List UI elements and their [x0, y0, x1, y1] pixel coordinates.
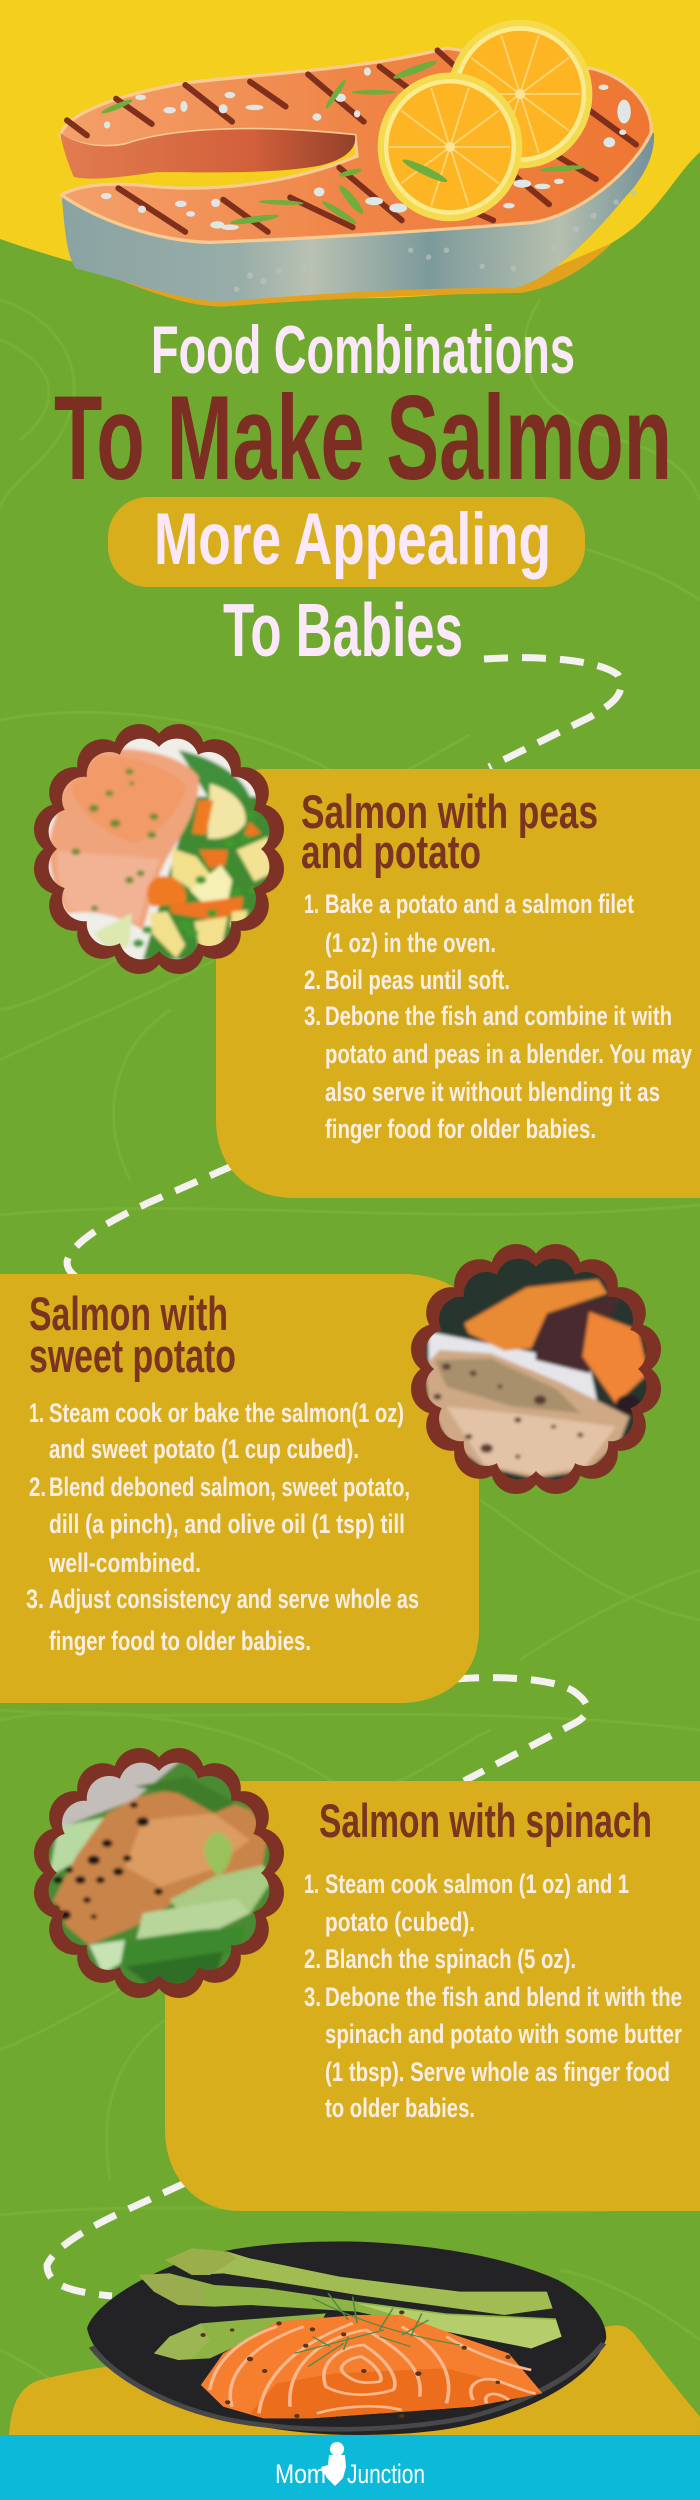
title line: To Babies: To Babies [223, 588, 463, 672]
title line: More Appealing: More Appealing [154, 499, 551, 580]
steps list: Blend deboned salmon, sweet potato, [49, 1472, 410, 1502]
steps list: Adjust consistency and serve whole as [49, 1584, 419, 1614]
heading: Salmon with peas [301, 785, 598, 838]
steps list: to older babies. [325, 2093, 475, 2123]
steps list: 2. [29, 1472, 46, 1502]
title pill [108, 497, 585, 587]
steps list: and sweet potato (1 cup cubed). [49, 1434, 359, 1464]
steps list: 3. [304, 1982, 321, 2012]
hero illustration: grilled salmon steak with orange slices [60, 20, 654, 307]
steps list: 3. [26, 1584, 44, 1614]
panel: salmon with peas and potato [216, 769, 700, 1198]
steps list: finger food for older babies. [325, 1114, 596, 1144]
steps list [304, 889, 692, 1144]
bottom illustration: salmon and asparagus on plate [9, 2242, 700, 2435]
steps list [304, 1869, 682, 2123]
photo badge: salmon with spinach [27, 1743, 295, 2003]
heading: Salmon with [29, 1287, 228, 1340]
steps list: 2. [304, 1944, 321, 1974]
heading: sweet potato [29, 1329, 236, 1382]
title block [54, 312, 672, 672]
steps list: Blanch the spinach (5 oz). [325, 1944, 576, 1974]
steps list: dill (a pinch), and olive oil (1 tsp) till [49, 1509, 405, 1539]
heading [301, 785, 598, 878]
steps list: 1. [29, 1398, 44, 1428]
heading [29, 1287, 236, 1382]
panel: salmon with spinach [165, 1781, 700, 2211]
steps list: 3. [304, 1001, 321, 1031]
photo badge: salmon with vegetables [27, 720, 295, 974]
steps list: (1 oz) in the oven. [325, 928, 496, 958]
logo: MomJunction [275, 2442, 425, 2489]
asparagus [138, 2248, 562, 2360]
footer band [0, 2435, 700, 2500]
logo: MomJunction: Mom [275, 2459, 326, 2489]
steps list: Steam cook or bake the salmon(1 oz) [49, 1398, 404, 1428]
yellow ground shape [9, 2325, 700, 2435]
steps list: finger food to older babies. [49, 1626, 311, 1656]
photo badge: salmon with sweet potato [402, 1244, 679, 1494]
black plate [87, 2242, 606, 2435]
salmon fillet [200, 2310, 542, 2418]
steps list [26, 1398, 419, 1656]
heading: and potato [301, 825, 481, 878]
steps list: 2. [304, 965, 321, 995]
steps list: Boil peas until soft. [325, 965, 510, 995]
steps list: potato (cubed). [325, 1907, 475, 1937]
dill sprig [295, 2293, 460, 2367]
steps list: 1. [304, 1869, 319, 1899]
yellow top panel [0, 0, 700, 298]
icon: mother and baby heart [321, 2442, 346, 2486]
steps list: well-combined. [48, 1548, 201, 1578]
decorative dashed path [47, 658, 621, 2296]
logo: MomJunction: Junction [347, 2459, 425, 2489]
panel: salmon with sweet potato [0, 1274, 479, 1703]
steps list: 1. [304, 889, 319, 919]
